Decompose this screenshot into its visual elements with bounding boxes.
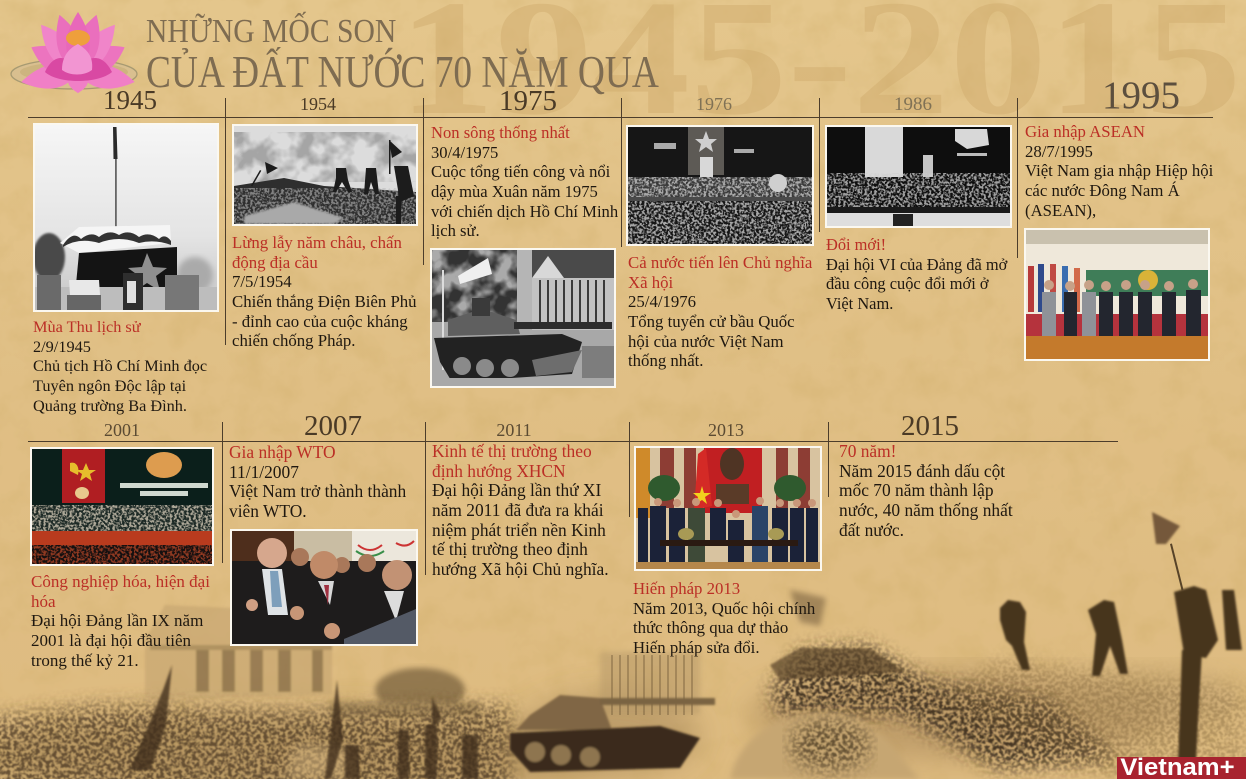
text: 1976: thống nhất. [628, 351, 704, 370]
photo: 1954 Dien Bien Phu flag raising [232, 124, 418, 226]
text: 1975: dậy mùa Xuân năm 1975 [431, 182, 598, 201]
text: 1986 [826, 235, 1008, 313]
text: 2011: Đại hội Đảng lần thứ XI [432, 480, 601, 500]
text: 1975 [431, 123, 618, 240]
text: 2011 [432, 441, 609, 579]
text: 1975: Non sông thống nhất [431, 123, 570, 142]
photo: 2007 WTO toast [230, 529, 418, 646]
text: 1954: động địa cầu [232, 253, 318, 272]
text: 1995: Việt Nam gia nhập Hiệp hội [1025, 161, 1213, 180]
photo: 1976 national assembly election [626, 125, 814, 246]
text: 2007: viên WTO. [229, 501, 307, 521]
year 1976: 1976 [696, 94, 732, 114]
text: 1975: Cuộc tổng tiến công và nổi [431, 162, 610, 181]
text: 1954: Chiến thắng Điện Biên Phủ [232, 292, 417, 311]
text: 2007: 11/1/2007 [229, 462, 299, 482]
text: 1986: đầu công cuộc đổi mới ở [826, 274, 989, 293]
text: 1975: lịch sử. [431, 221, 480, 240]
text: 2013: Năm 2013, Quốc hội chính [633, 599, 815, 618]
text: 2001: trong thế kỷ 21. [31, 651, 139, 670]
left building and crowd [0, 605, 510, 779]
year 1945: 1945 [103, 85, 157, 115]
text: 1976: 25/4/1976 [628, 292, 696, 311]
text: 1954: Lừng lẫy năm châu, chấn [232, 233, 402, 252]
text: 2015 [839, 441, 1013, 540]
text: 1945: Mùa Thu lịch sử [33, 317, 141, 336]
year 1975: 1975 [499, 85, 557, 117]
text: 2001 [31, 572, 210, 670]
year 2013: 2013 [708, 420, 744, 440]
title: NHỮNG MỐC SON [146, 13, 396, 50]
text: 2013 [633, 579, 816, 657]
text: 2011: niệm phát triển nền Kinh [432, 520, 606, 540]
photo: 2001 ninth party congress [30, 447, 214, 566]
text: 1995: (ASEAN), [1025, 201, 1096, 220]
text: 1975: với chiến dịch Hồ Chí Minh [431, 202, 618, 221]
text: 2015: 70 năm! [839, 441, 896, 461]
year 2001: 2001 [104, 420, 140, 440]
text: 1945: Chủ tịch Hồ Chí Minh đọc [33, 356, 207, 375]
photo: 1975 tank at the palace gate [430, 248, 616, 388]
year 2015: 2015 [901, 410, 959, 442]
text: 2001: hóa [31, 592, 56, 611]
year 2007: 2007 [304, 410, 362, 442]
text: 1945: Quảng trường Ba Đình. [33, 396, 187, 415]
text: 1986: Đổi mới! [826, 235, 886, 254]
photo: 1945 independence stage [33, 123, 219, 312]
text: 2013: thức thông qua dự thảo [633, 618, 788, 637]
text: 1995 [1025, 122, 1213, 220]
text: 1954: 7/5/1954 [232, 272, 292, 291]
text: 1986: Việt Nam. [826, 294, 893, 313]
text: 1945: 2/9/1945 [33, 337, 91, 356]
text: 1976: hội của nước Việt Nam [628, 332, 784, 351]
photo: 2013 constitution signing [634, 446, 822, 571]
text: 2007: Gia nhập WTO [229, 442, 336, 462]
text: 2011: định hướng XHCN [432, 461, 566, 481]
text: 1976 [628, 253, 812, 370]
text: 2015: Năm 2015 đánh dấu cột [839, 461, 1005, 481]
text: 2001: Công nghiệp hóa, hiện đại [31, 572, 210, 591]
text: 2011: tế thị trường theo định [432, 539, 588, 559]
text: 2011: hướng Xã hội Chủ nghĩa. [432, 559, 609, 579]
text: 1954: - đỉnh cao của cuộc kháng [232, 312, 408, 331]
text: 2015: đất nước. [839, 520, 904, 540]
photo: 1986 sixth party congress [825, 125, 1012, 228]
text: 1945: Tuyên ngôn Độc lập tại [33, 376, 186, 395]
tank and gate [510, 652, 715, 772]
text: 2007: Việt Nam trở thành thành [229, 481, 406, 501]
text: 1954: chiến chống Pháp. [232, 331, 356, 350]
text: 1954 [232, 233, 417, 350]
text: 1976: Xã hội [628, 273, 673, 292]
year 2011: 2011 [496, 420, 532, 440]
text: 1995: 28/7/1995 [1025, 142, 1093, 161]
text: 2013: Hiến pháp 2013 [633, 579, 740, 598]
text: 2001: 2001 là đại hội đầu tiên [31, 631, 191, 650]
text: 2013: Hiến pháp sửa đổi. [633, 638, 760, 657]
text: 2011: Kinh tế thị trường theo [432, 441, 592, 461]
text: 1945 [33, 317, 207, 415]
title [146, 12, 659, 97]
text: 1995: các nước Đông Nam Á [1025, 181, 1180, 200]
text: 2015: nước, 40 năm thống nhất [839, 500, 1013, 520]
text: 2011: năm 2011 đã đưa ra khái [432, 500, 604, 520]
text: 1976: Cả nước tiến lên Chủ nghĩa [628, 253, 812, 272]
title: CỦA ĐẤT NƯỚC 70 NĂM QUA [146, 47, 659, 97]
year 1995: 1995 [1102, 74, 1180, 117]
text: 1975: 30/4/1975 [431, 143, 498, 162]
text: 1995: Gia nhập ASEAN [1025, 122, 1145, 141]
battlefield with soldiers and flag [730, 512, 1246, 779]
photo: 1995 ASEAN accession [1024, 228, 1210, 361]
text: 2001: Đại hội Đảng lần IX năm [31, 611, 203, 630]
text: 1976: Tổng tuyển cử bầu Quốc [628, 312, 795, 331]
year 1954: 1954 [300, 94, 336, 114]
text: 2007 [229, 442, 406, 521]
text: 2015: mốc 70 năm thành lập [839, 480, 994, 500]
year 1986: 1986 [894, 94, 932, 115]
icon: lotus on a plate [10, 12, 138, 93]
text: 1986: Đại hội VI của Đảng đã mở [826, 255, 1007, 274]
